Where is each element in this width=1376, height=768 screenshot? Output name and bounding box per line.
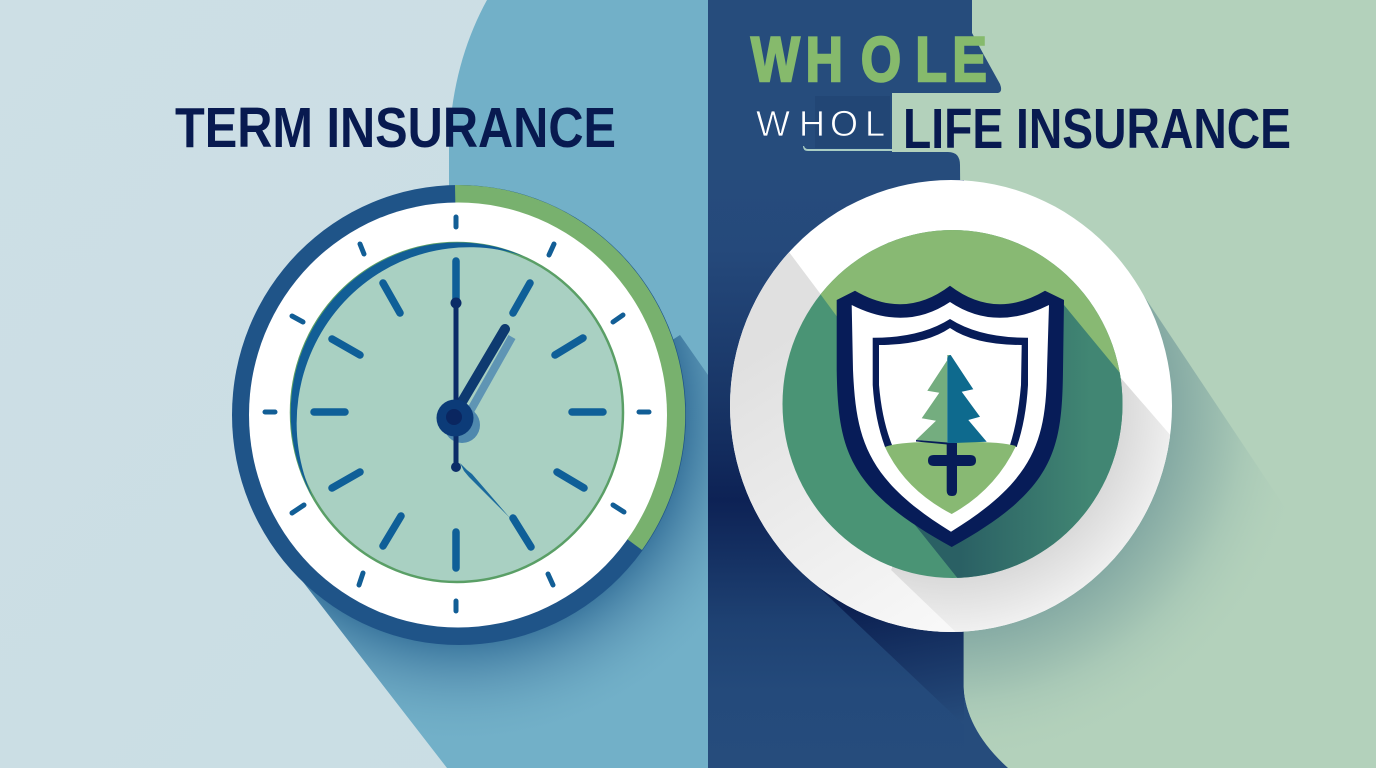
tree trunk cross (928, 443, 976, 496)
white circle left shaded area (730, 252, 956, 632)
clock outer blue ring (232, 185, 686, 645)
clock hub shadow and hour hand shadow (444, 337, 512, 443)
navy shading behind circle (708, 180, 964, 768)
shield circle shadow on navy (790, 560, 964, 725)
clock green ring arc (455, 185, 685, 550)
clock face blue crescent (291, 242, 523, 498)
clock face (291, 243, 623, 582)
panel: whole life navy shape (708, 0, 1008, 768)
clock minor ticks (265, 217, 649, 611)
light green cap (820, 230, 1121, 380)
shield long shadow (915, 305, 1122, 578)
green hill (885, 442, 1016, 514)
shield inner white field (879, 328, 1022, 445)
underline under whol (803, 146, 892, 151)
heading: whole: WHOLE (751, 25, 987, 95)
clock hour hand (456, 329, 505, 412)
white circle (730, 180, 1172, 632)
clock hub (436, 400, 474, 436)
icon: clock (232, 185, 686, 645)
shield circle shadow on green (964, 290, 1300, 768)
shield white inner (852, 302, 1049, 532)
clock long shadow (300, 335, 708, 768)
icon: shield circle (700, 180, 1172, 640)
clock major ticks (314, 261, 603, 568)
shield (837, 286, 1064, 547)
clock white bezel (249, 202, 667, 628)
shield navy border (837, 286, 1064, 547)
clock minute hand (450, 298, 462, 472)
panel: whole life green background (708, 0, 1376, 768)
text: whol thin label: WHOL (756, 103, 885, 144)
title: life insurance: LIFE INSURANCE (903, 97, 1291, 161)
tree right half (947, 355, 987, 443)
tree (916, 355, 987, 444)
title: term insurance: TERM INSURANCE (175, 96, 616, 160)
green disc (782, 230, 1122, 578)
tree left half (916, 355, 951, 443)
clock second hand (460, 463, 510, 518)
shield inner navy frame (873, 319, 1028, 447)
tree base line (916, 440, 947, 444)
panel: term insurance blue curved shape (300, 0, 708, 768)
white circle right shaded band (891, 377, 1172, 640)
panel: term insurance light background (0, 0, 708, 768)
